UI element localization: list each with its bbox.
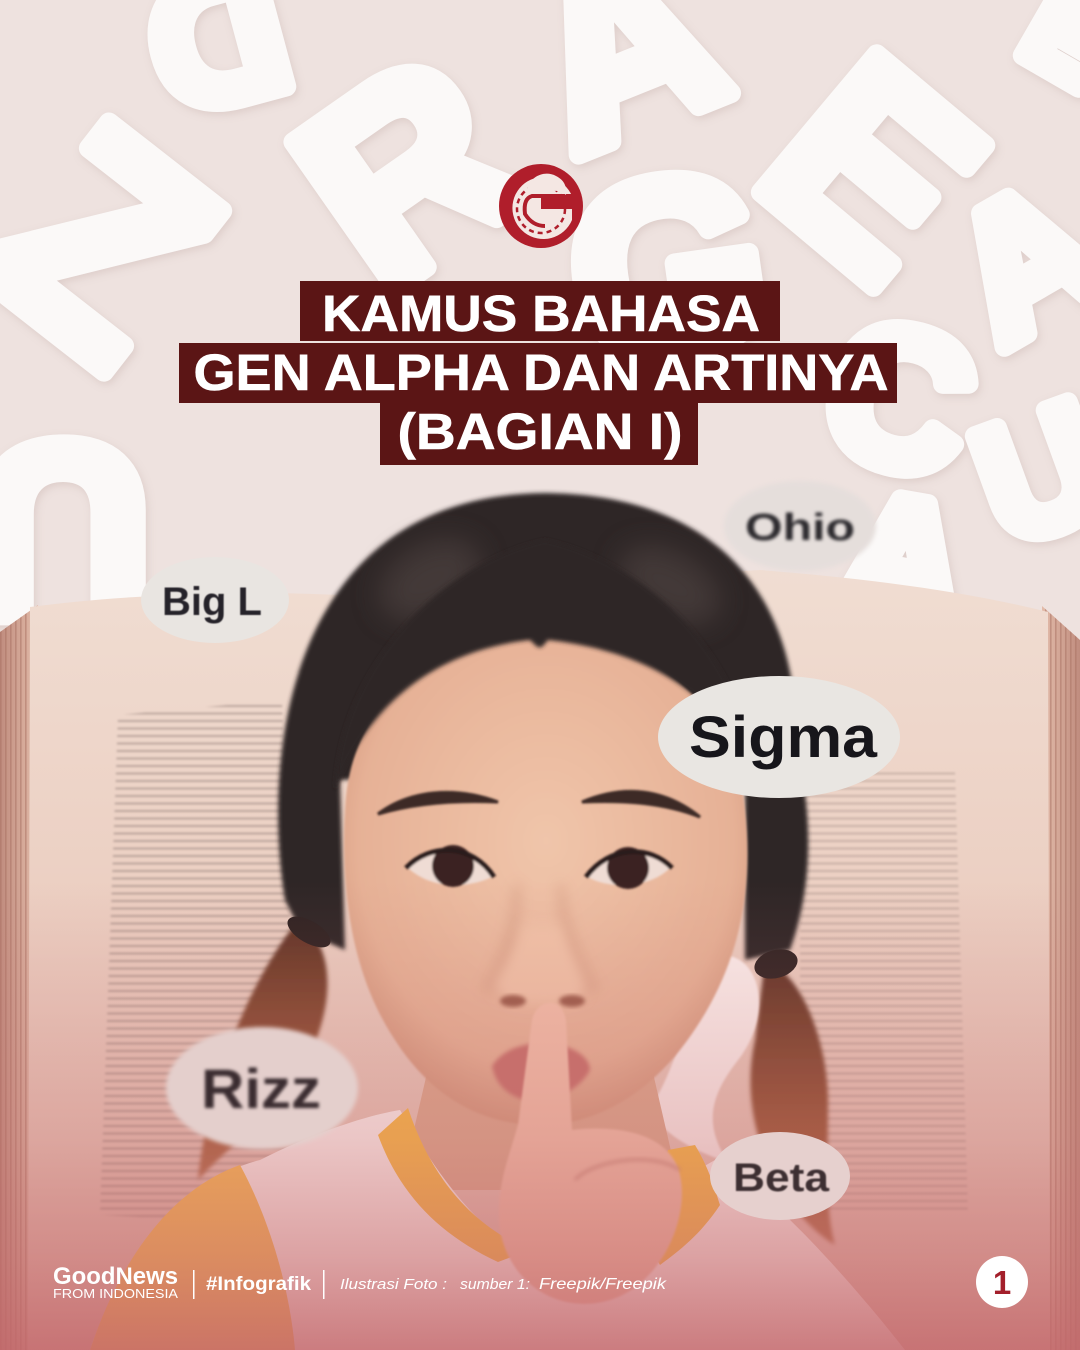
shirt collar (378, 1108, 720, 1265)
bubble: Rizz: Rizz (201, 1057, 321, 1120)
nose (494, 925, 586, 1005)
open book (0, 570, 1080, 1350)
logo bird head (527, 174, 566, 195)
photo credit (340, 1276, 667, 1293)
hashtag: #Infografik (206, 1274, 311, 1295)
lips (492, 1043, 590, 1101)
bubble: Sigma: Sigma (689, 705, 878, 770)
title line 1: KAMUS BAHASA (322, 285, 760, 342)
nose shading (480, 880, 600, 1000)
logo white ring (512, 177, 572, 239)
title line 3: (BAGIAN I) (398, 403, 682, 460)
book page edge right (1042, 606, 1080, 1350)
logo (499, 164, 583, 248)
blurred text right page (800, 770, 968, 1215)
right eye (586, 847, 672, 889)
logo red G (525, 196, 573, 226)
title line 2: GEN ALPHA DAN ARTINYA (194, 344, 888, 401)
brand: FROM INDONESIA (53, 1287, 179, 1301)
bubble: Ohio: Ohio (745, 507, 855, 549)
hand (499, 1003, 682, 1304)
face (344, 635, 747, 1125)
neck (400, 1060, 680, 1190)
background letters: C (803, 275, 995, 522)
bottom rose tint (0, 880, 1080, 1350)
hair highlights (365, 522, 734, 640)
footer (53, 1263, 667, 1301)
portrait of girl (90, 493, 905, 1350)
background letters: R (248, 0, 568, 344)
right eyebrow (582, 791, 700, 817)
bubble: Beta: Beta (733, 1156, 830, 1200)
pale collar pad (654, 955, 759, 1162)
bubble: Sigma (658, 676, 900, 798)
photo credit: Ilustrasi Foto : (340, 1277, 447, 1293)
photo credit: sumber 1: (460, 1276, 530, 1293)
shirt (90, 1110, 905, 1350)
book page edge left (0, 605, 38, 1350)
page number: 1 (993, 1264, 1011, 1301)
right pigtail (750, 960, 835, 1245)
bubble: Rizz (166, 1027, 358, 1149)
bubble: Big L: Big L (162, 580, 262, 624)
background letters (0, 0, 1080, 669)
title (179, 281, 897, 465)
bubble: Big L (141, 557, 289, 643)
bubble: Beta (710, 1132, 850, 1220)
bubble: Ohio (724, 481, 876, 571)
book pages (28, 570, 1050, 1350)
hair over forehead (335, 540, 755, 790)
background letters: E (711, 0, 1034, 336)
finger contour (575, 1160, 680, 1180)
background letters: A (830, 456, 979, 658)
background letters: G (553, 117, 784, 420)
left pigtail (198, 920, 327, 1180)
photo credit: Freepik/Freepik (539, 1276, 667, 1293)
shirt left sleeve yellow (90, 1165, 295, 1350)
hair (278, 493, 808, 960)
logo texture (517, 185, 565, 233)
page number (976, 1256, 1028, 1308)
blurred text left page (100, 700, 300, 1225)
brand: GoodNews (53, 1263, 178, 1290)
hair ties (283, 910, 801, 983)
left eyebrow (378, 792, 498, 814)
left eye (406, 845, 494, 887)
